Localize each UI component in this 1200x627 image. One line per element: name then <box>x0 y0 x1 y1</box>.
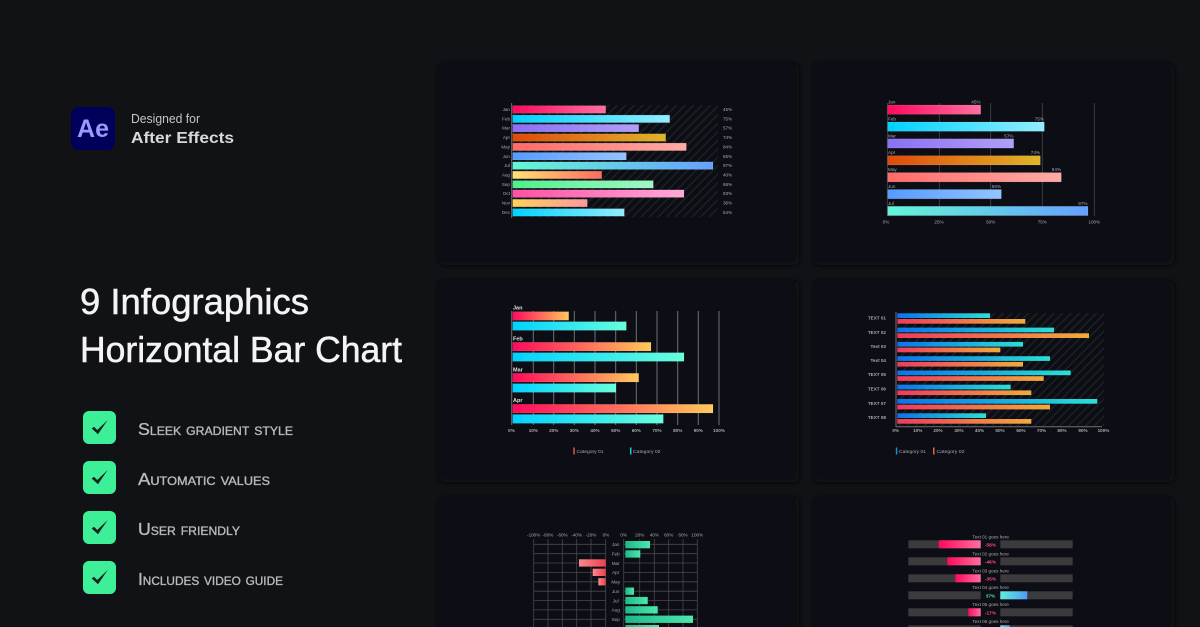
panel: labelled bars 0-100%: 97% <box>1078 201 1088 206</box>
panel: single-series bars with hatch: 75% <box>723 116 732 121</box>
logo: After Effects: Ae <box>77 115 109 143</box>
icon: check 2 <box>83 461 116 494</box>
panel: diverging bars: 80% <box>678 532 688 538</box>
panel: grouped bars with legend <box>437 279 796 479</box>
panel: paired bars with hatch and legend: TEXT 06 <box>868 386 886 392</box>
panel: grouped bars with legend: 20% <box>549 428 558 433</box>
panel: diverging bars: 0% <box>620 532 627 538</box>
panel: single-series bars with hatch: Dec <box>502 210 511 215</box>
panel: paired bars with hatch and legend <box>812 279 1171 479</box>
panel: single-series bars with hatch: 84% <box>723 144 732 149</box>
panel: labelled bars 0-100%: 57% <box>1004 133 1014 138</box>
panel: diverging bars: -60% <box>557 532 568 538</box>
panel: labelled bars 0-100%: Mar <box>888 133 896 138</box>
panel: single-series bars with hatch: Mar <box>502 126 510 131</box>
feature: user friendly: User friendly <box>138 519 240 539</box>
panel: diverging bars: Feb <box>612 551 620 556</box>
panel: diverging bars: Mar <box>612 561 620 566</box>
panel: diverging bars: Jan <box>612 542 620 547</box>
panel: paired bars with hatch and legend: 60% <box>1016 428 1026 433</box>
panel: grouped bars with legend: 30% <box>570 428 579 433</box>
panel: labelled bars 0-100%: Jun <box>888 184 896 189</box>
panel: single-series bars with hatch: Feb <box>502 116 510 121</box>
panel: track bars: 37% <box>986 593 996 599</box>
panel: labelled bars 0-100%: Jan <box>888 100 896 104</box>
panel: track bars: Text 06 goes here <box>972 619 1009 624</box>
panel: diverging bars: 40% <box>650 532 659 538</box>
panel: single-series bars with hatch: Oct <box>503 191 511 196</box>
panel: paired bars with hatch and legend: 10% <box>913 428 922 433</box>
logo: After Effects <box>71 107 115 150</box>
panel: single-series bars with hatch: 40% <box>723 172 732 178</box>
panel: track bars: -35% <box>985 576 997 582</box>
panel: grouped bars with legend: Feb <box>513 336 523 342</box>
panel: diverging bars: -80% <box>543 532 553 538</box>
panel: paired bars with hatch and legend: TEXT 07 <box>868 401 886 406</box>
panel: single-series bars with hatch: 83% <box>723 191 732 196</box>
panel: grouped bars with legend: 10% <box>529 428 538 433</box>
panel: paired bars with hatch and legend: 90% <box>1078 428 1088 433</box>
feature: includes video guide: Includes video guide <box>138 569 283 589</box>
panel: track bars: -46% <box>985 559 997 565</box>
panel: labelled bars 0-100%: 45% <box>971 100 980 104</box>
panel: paired bars with hatch and legend: TEXT 05 <box>868 372 886 377</box>
panel: single-series bars with hatch: 68% <box>723 182 732 187</box>
panel: single-series bars with hatch: 57% <box>723 126 732 131</box>
panel: single-series bars with hatch: May <box>501 144 511 149</box>
panel: grouped bars with legend: 70% <box>652 428 662 433</box>
icon: check 4 <box>83 561 116 594</box>
panel: track bars: -58% <box>985 542 997 548</box>
panel: single-series bars with hatch: 54% <box>723 210 732 215</box>
panel: labelled bars 0-100% <box>812 62 1171 262</box>
panel: track bars: Text 03 goes here <box>972 568 1009 574</box>
panel: single-series bars with hatch: Apr <box>503 135 510 140</box>
icon: check 1 <box>83 411 116 444</box>
panel: paired bars with hatch and legend: TEXT 02 <box>868 330 886 335</box>
panel: grouped bars with legend: 50% <box>611 428 620 433</box>
panel: diverging bars: 100% <box>691 532 703 538</box>
panel: labelled bars 0-100%: Jul <box>888 201 894 206</box>
icon: check 3 <box>83 511 116 544</box>
title <box>80 281 402 370</box>
panel: track bars: Text 05 goes here <box>972 602 1009 607</box>
panel: diverging bars: Jul <box>613 598 619 603</box>
panel: single-series bars with hatch: 36% <box>723 201 732 206</box>
panel: diverging bars: May <box>611 580 621 584</box>
panel: labelled bars 0-100%: May <box>888 167 897 172</box>
panel: grouped bars with legend: Apr <box>513 398 523 404</box>
panel: paired bars with hatch and legend: Category 01 <box>899 449 926 454</box>
panel: labelled bars 0-100%: 25% <box>934 220 944 224</box>
panel: single-series bars with hatch: 55% <box>723 154 732 159</box>
panel: labelled bars 0-100%: 84% <box>1052 167 1061 172</box>
panel shadows <box>439 64 1174 627</box>
panel: grouped bars with legend: 0% <box>508 428 515 433</box>
panel: paired bars with hatch and legend: 20% <box>933 428 943 433</box>
feature: automatic values: Automatic values <box>138 469 270 489</box>
panel: grouped bars with legend: Jan <box>513 306 523 312</box>
panel: paired bars with hatch and legend: 70% <box>1037 428 1046 433</box>
panel: track bars: Text 04 goes here <box>972 585 1009 590</box>
panel: single-series bars with hatch: Nov <box>502 201 511 206</box>
panel: track bars: -17% <box>985 610 997 616</box>
panel: labelled bars 0-100%: 0% <box>883 220 889 224</box>
panel: diverging bars: 20% <box>635 532 644 538</box>
panel: labelled bars 0-100%: Feb <box>888 116 896 122</box>
panel: grouped bars with legend: Mar <box>513 368 524 374</box>
title: 9 Infographics <box>80 281 309 322</box>
panel: paired bars with hatch and legend: 0% <box>892 428 899 433</box>
panel: grouped bars with legend: 100% <box>713 428 725 433</box>
panel: track bars: Text 01 goes here <box>972 534 1009 540</box>
panel: track bars <box>812 496 1171 627</box>
panel: grouped bars with legend: 80% <box>673 428 682 433</box>
panel: diverging bars: -40% <box>571 532 582 538</box>
title: Horizontal Bar Chart <box>80 329 402 370</box>
designed for text: Designed for <box>131 111 201 126</box>
panel: single-series bars with hatch: 97% <box>723 163 732 168</box>
panel: grouped bars with legend: 40% <box>590 428 600 433</box>
panel: paired bars with hatch and legend: TEXT 08 <box>868 415 886 420</box>
panel: paired bars with hatch and legend: 40% <box>975 428 984 433</box>
panel: grouped bars with legend: Category 01 <box>576 449 604 454</box>
designed for text: After Effects <box>131 130 234 147</box>
panel: single-series bars with hatch <box>437 62 796 262</box>
panel: diverging bars <box>437 496 796 627</box>
panel: labelled bars 0-100%: 50% <box>986 220 995 224</box>
panel: grouped bars with legend: 90% <box>694 428 703 433</box>
panel: single-series bars with hatch: Aug <box>502 172 510 178</box>
panel: diverging bars: Aug <box>612 608 620 613</box>
panel: paired bars with hatch and legend: Category 02 <box>936 449 965 454</box>
panel: diverging bars: Sep <box>612 617 620 622</box>
panel: paired bars with hatch and legend: Text 04 <box>870 358 886 363</box>
panel: diverging bars: -100% <box>527 532 540 538</box>
panel: paired bars with hatch and legend: Text 03 <box>870 344 886 349</box>
panel: single-series bars with hatch: Jun <box>503 154 510 159</box>
panel: labelled bars 0-100%: 75% <box>1038 220 1047 224</box>
panel: diverging bars: -20% <box>586 532 596 538</box>
panel: single-series bars with hatch: 74% <box>723 135 732 140</box>
panel: single-series bars with hatch: Jul <box>504 163 510 168</box>
panel: paired bars with hatch and legend: 80% <box>1057 428 1067 433</box>
panel: labelled bars 0-100%: 75% <box>1035 116 1044 122</box>
panel: paired bars with hatch and legend: TEXT 01 <box>868 316 886 320</box>
panel: grouped bars with legend: 60% <box>632 428 641 433</box>
panel: grouped bars with legend: Category 02 <box>633 449 661 454</box>
panel: labelled bars 0-100%: 74% <box>1031 150 1040 155</box>
feature list <box>83 411 293 594</box>
panel: diverging bars: 0% <box>603 532 609 538</box>
panel: single-series bars with hatch: Sep <box>502 182 510 187</box>
panel: labelled bars 0-100%: Apr <box>888 150 896 155</box>
designed for text <box>131 111 234 147</box>
panel: paired bars with hatch and legend: 100% <box>1098 428 1109 433</box>
panel: single-series bars with hatch: 45% <box>723 107 732 112</box>
panel: paired bars with hatch and legend: 30% <box>954 428 964 433</box>
panel: diverging bars: Jun <box>612 589 620 594</box>
panel: single-series bars with hatch: Jan <box>503 107 510 112</box>
panel: labelled bars 0-100%: 100% <box>1088 220 1100 224</box>
panel: track bars: Text 02 goes here <box>972 552 1009 556</box>
panel: paired bars with hatch and legend: 50% <box>995 428 1005 433</box>
panel: diverging bars: 60% <box>664 532 673 538</box>
panel: diverging bars: Apr <box>612 570 620 575</box>
feature: sleek gradient style: Sleek gradient style <box>138 419 293 439</box>
panel: labelled bars 0-100%: 55% <box>992 184 1001 189</box>
